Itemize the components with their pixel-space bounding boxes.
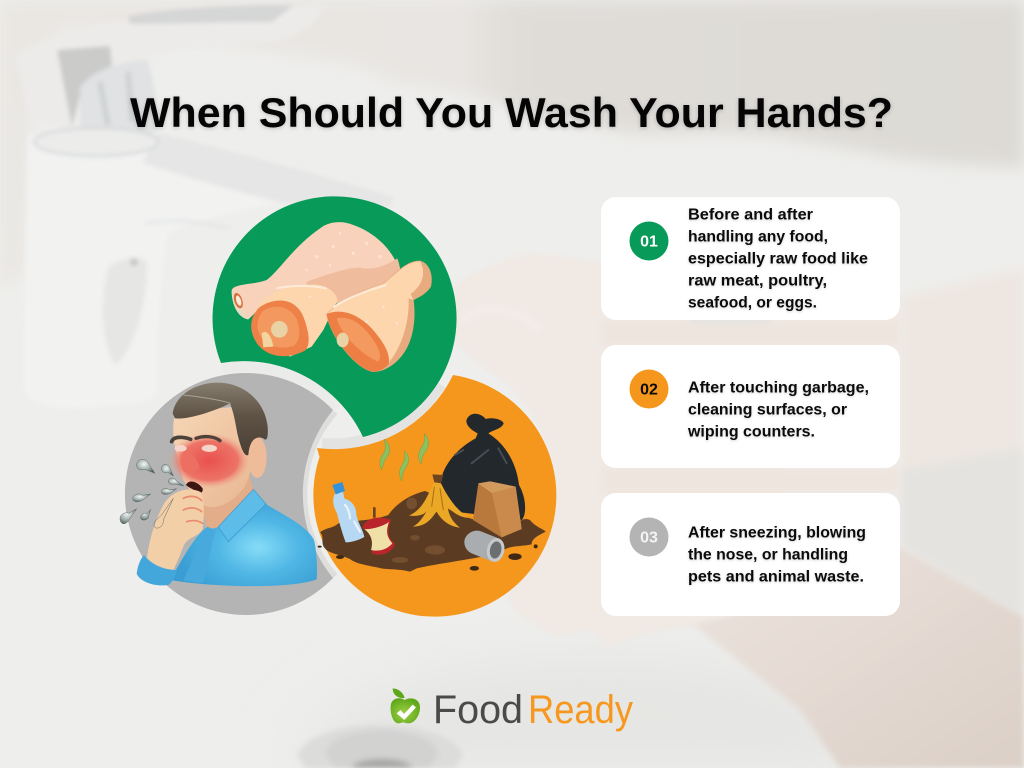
number badge 01 [630,222,668,260]
text block 3: After sneezing, blowing [688,524,866,542]
icon: green apple with check [391,688,420,723]
text block 1: seafood, or eggs. [688,294,817,312]
panel: grey circle with sneezing man [120,373,333,615]
icon: garbage pile [318,414,546,572]
card 3: sneezing and pets [601,493,900,616]
wordmark: Food [433,688,523,732]
text block 1 [688,206,868,312]
logo: FoodReady [391,688,633,732]
text block 2: cleaning surfaces, or [688,402,847,418]
title: When Should You Wash Your Hands? [130,89,893,136]
drain [297,725,463,768]
panel: green circle with raw chicken [213,196,457,437]
sneeze droplets [120,459,184,528]
number badge 03: 03 [640,530,658,546]
card 1: handling food [601,197,900,320]
icon: raw chicken drumsticks [232,222,431,372]
hands with soap [620,500,1024,768]
apple core [362,518,395,555]
shirt [170,489,317,586]
dirt pile [320,491,546,572]
tin can [464,531,500,562]
icon: man sneezing into hand [120,383,317,586]
hand [146,489,204,571]
text block 1: handling any food, [688,228,828,246]
text block 2: After touching garbage, [688,380,869,396]
gaps between circles [222,366,440,578]
text block 1: especially raw food like [688,250,868,268]
collar [218,489,266,542]
text block 3: the nose, or handling [688,546,848,564]
text block 3: pets and animal waste. [688,568,864,586]
stink lines [380,433,429,481]
card 2: garbage and cleaning [601,345,900,468]
number badge 02: 02 [640,382,658,398]
garbage bag [440,414,525,520]
text block 1: raw meat, poultry, [688,272,827,290]
number badge 01: 01 [640,234,658,250]
faucet [15,5,393,408]
text block 2: wiping counters. [687,424,815,440]
plastic bottle [333,492,364,542]
logo: FoodReady: Ready [528,688,633,732]
text block 2 [687,380,869,440]
text block 3 [688,524,866,586]
hair [173,383,268,455]
text block 1: Before and after [688,206,813,224]
banana peel [409,474,470,528]
cuff [137,555,177,585]
number badge 03 [630,518,668,556]
panel: orange circle with garbage pile [313,375,556,617]
neck and face [200,470,254,530]
paper bag [473,481,522,537]
number badge 02 [630,370,668,408]
